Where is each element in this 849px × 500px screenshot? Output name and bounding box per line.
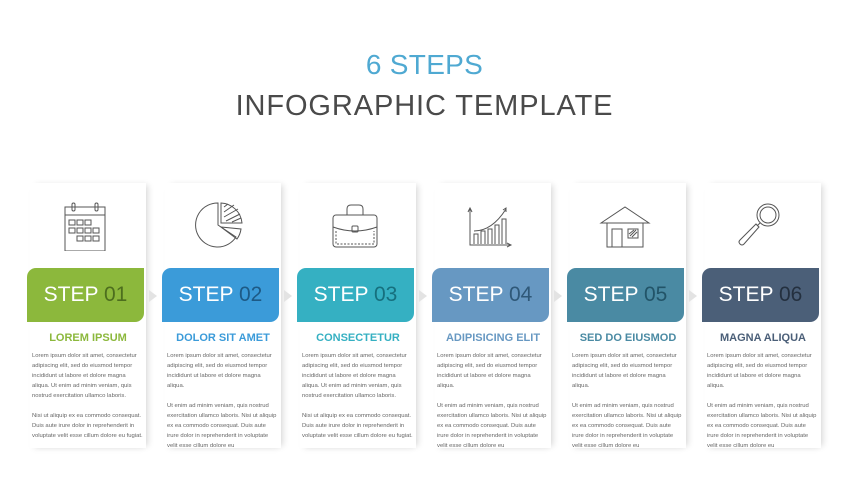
step tab: STEP 06 bbox=[719, 283, 802, 306]
title: 6 STEPS bbox=[366, 49, 483, 80]
heading: LOREM IPSUM bbox=[49, 332, 127, 344]
text bbox=[437, 353, 546, 449]
step tab bbox=[702, 268, 819, 322]
icon: house bbox=[600, 206, 650, 248]
heading: CONSECTETUR bbox=[316, 332, 400, 344]
step tab: STEP 05 bbox=[584, 283, 667, 306]
text: Lorem ipsum dolor sit amet, consectetur adipiscing elit, sed do eiusmod tempor incididunt ut labore et dolore magna aliqua. bbox=[572, 353, 677, 389]
text bbox=[707, 353, 816, 449]
text: Ut enim ad minim veniam, quis nostrud exercitation ullamco laboris. Nisi ut aliquip ex ea commodo consequat. Duis aute irure dolor in reprehenderit in voluptate velit esse cillum dolore eu bbox=[167, 403, 276, 449]
heading: MAGNA ALIQUA bbox=[720, 332, 806, 344]
step tab: STEP 01 bbox=[44, 283, 127, 306]
text: Ut enim ad minim veniam, quis nostrud exercitation ullamco laboris. Nisi ut aliquip ex ea commodo consequat. Duis aute irure dolor in reprehenderit in voluptate velit esse cillum dolore eu bbox=[572, 403, 681, 449]
icon: calendar bbox=[64, 202, 106, 251]
arrow bbox=[419, 290, 427, 302]
panel: step 06 bbox=[702, 182, 826, 450]
text bbox=[32, 353, 143, 439]
icon: pie chart bbox=[195, 202, 242, 248]
text: Lorem ipsum dolor sit amet, consectetur adipiscing elit, sed do eiusmod tempor incididunt ut labore et dolore magna aliqua. bbox=[707, 353, 812, 389]
text: Lorem ipsum dolor sit amet, consectetur adipiscing elit, sed do eiusmod tempor incididunt ut labore et dolore magna aliqua. Ut enim ad minim veniam, quis nostrud exercitation ullamco laboris. bbox=[32, 353, 137, 399]
text: Lorem ipsum dolor sit amet, consectetur adipiscing elit, sed do eiusmod tempor incididunt ut labore et dolore magna aliqua. bbox=[437, 353, 542, 389]
icon: magnifier bbox=[738, 204, 780, 246]
step tab bbox=[567, 268, 684, 322]
heading: ADIPISICING ELIT bbox=[446, 332, 540, 344]
step tab: STEP 02 bbox=[179, 283, 262, 306]
text bbox=[167, 353, 276, 449]
text: Ut enim ad minim veniam, quis nostrud exercitation ullamco laboris. Nisi ut aliquip ex ea commodo consequat. Duis aute irure dolor in reprehenderit in voluptate velit esse cillum dolore eu bbox=[437, 403, 546, 449]
panel: step 01 bbox=[27, 182, 157, 450]
subtitle: INFOGRAPHIC TEMPLATE bbox=[236, 90, 613, 122]
panel: step 03 bbox=[297, 182, 427, 450]
heading: DOLOR SIT AMET bbox=[176, 332, 270, 344]
panel: step 04 bbox=[432, 182, 562, 450]
heading: SED DO EIUSMOD bbox=[580, 332, 676, 344]
arrow bbox=[284, 290, 292, 302]
panel: step 02 bbox=[162, 182, 292, 450]
text: Lorem ipsum dolor sit amet, consectetur adipiscing elit, sed do eiusmod tempor incididunt ut labore et dolore magna aliqua. Ut enim ad minim veniam, quis nostrud exercitation ullamco laboris. bbox=[302, 353, 407, 399]
text: Ut enim ad minim veniam, quis nostrud exercitation ullamco laboris. Nisi ut aliquip ex ea commodo consequat. Duis aute irure dolor in reprehenderit in voluptate velit esse cillum dolore eu bbox=[707, 403, 816, 449]
icon: briefcase bbox=[332, 204, 378, 248]
arrow bbox=[554, 290, 562, 302]
text bbox=[302, 353, 413, 439]
step tab bbox=[27, 268, 144, 322]
step tab: STEP 03 bbox=[314, 283, 397, 306]
panel: step 05 bbox=[567, 182, 697, 450]
arrow bbox=[689, 290, 697, 302]
step tab bbox=[432, 268, 549, 322]
step tab bbox=[297, 268, 414, 322]
text: Lorem ipsum dolor sit amet, consectetur adipiscing elit, sed do eiusmod tempor incididunt ut labore et dolore magna aliqua. bbox=[167, 353, 272, 389]
icon: growth chart bbox=[468, 207, 512, 248]
step tab bbox=[162, 268, 279, 322]
text bbox=[572, 353, 682, 449]
arrow bbox=[149, 290, 157, 302]
step tab: STEP 04 bbox=[449, 283, 532, 306]
text: Nisi ut aliquip ex ea commodo consequat. Duis aute irure dolor in reprehenderit in voluptate velit esse cillum dolore eu fugiat. bbox=[32, 413, 143, 439]
text: Nisi ut aliquip ex ea commodo consequat. Duis aute irure dolor in reprehenderit in voluptate velit esse cillum dolore eu fugiat. bbox=[302, 413, 413, 439]
